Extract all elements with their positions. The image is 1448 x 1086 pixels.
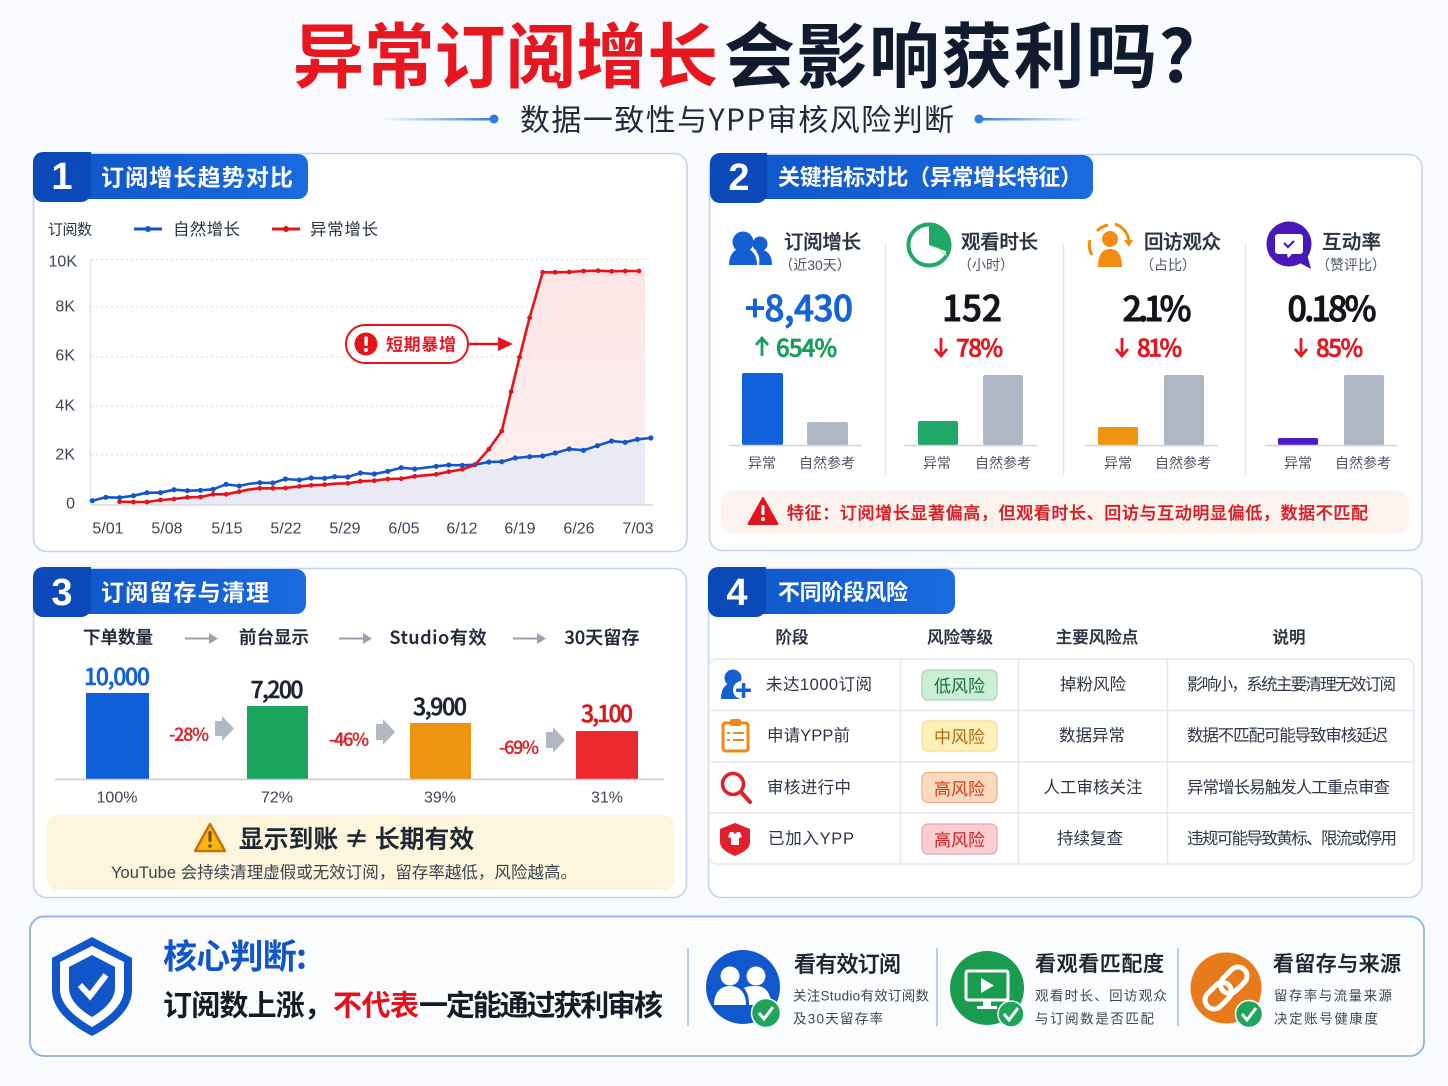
heading: panel 2 — [710, 153, 1093, 203]
row: under review — [722, 772, 1390, 802]
x axis labels: 5/29 — [329, 520, 361, 538]
panel: core conclusion — [30, 916, 1424, 1056]
metric: watch time: （小时） — [958, 257, 1014, 273]
row: before applying YPP: 数据异常 — [1059, 726, 1125, 745]
heading: panel 3: 订阅留存与清理 — [101, 574, 269, 608]
callout: feature summary: 特征：订阅增长显著偏高，但观看时长、回访与互动明显偏低，数据不匹配 — [787, 499, 1368, 524]
core judgement text: 一定能通过获利审核 — [419, 982, 663, 1024]
metric: returning viewers: 回访观众 — [1144, 226, 1221, 254]
heading: panel 2: 关键指标对比（异常增长特征） — [778, 160, 1082, 192]
core judgement text: 订阅数上涨， — [163, 982, 333, 1024]
heading: panel 4: 4 — [726, 572, 748, 614]
chart legend: 自然增长 — [173, 220, 240, 239]
x axis labels — [92, 520, 654, 538]
metric: returning viewers — [1085, 224, 1221, 471]
series: abnormal growth — [117, 268, 641, 504]
metric: returning viewers: 自然参考 — [1155, 455, 1211, 471]
metric: watch time — [904, 224, 1038, 471]
risk table — [709, 659, 1414, 864]
title: 异常订阅增长 — [293, 1, 718, 103]
tip: retention and source: 看留存与来源 — [1273, 948, 1401, 978]
bar chart: retention: 3,900 — [413, 688, 467, 722]
metric: engagement: （赞评比） — [1316, 257, 1386, 273]
metric: engagement — [1265, 222, 1397, 471]
funnel step labels: 下单数量 — [83, 624, 153, 650]
metric: engagement: 互动率 — [1322, 226, 1381, 254]
tip: retention and source: 留存率与流量来源 — [1274, 988, 1392, 1004]
row: under review: 审核进行中 — [767, 778, 851, 797]
icon: returning viewer — [1089, 224, 1133, 267]
row: under review: 高风险 — [934, 775, 985, 800]
tip: valid subscribers — [706, 947, 930, 1028]
metric: engagement: 0.18% — [1288, 282, 1376, 331]
bar chart: retention: 100% — [97, 790, 137, 806]
subtitle — [380, 96, 1088, 140]
heading: panel 4 — [708, 567, 955, 617]
row: joined YPP: 持续复查 — [1057, 829, 1123, 848]
core judgement text — [163, 930, 663, 1024]
metric: subscription growth: 订阅增长 — [784, 226, 861, 254]
panel: key metrics — [710, 153, 1422, 550]
x axis labels: 6/05 — [388, 520, 420, 538]
metric: watch time: 异常 — [923, 455, 951, 471]
bar chart: retention — [55, 658, 664, 806]
row: joined YPP: 高风险 — [934, 826, 985, 851]
icon: security shield — [52, 937, 132, 1036]
row: under 1000 subscribers: 影响小，系统主要清理无效订阅 — [1187, 675, 1396, 694]
table header: 主要风险点 — [1056, 624, 1138, 648]
panel: risk by stage — [708, 567, 1422, 898]
chart legend — [48, 220, 378, 239]
y axis labels: 8K — [55, 298, 75, 316]
callout: long-term validity — [47, 815, 674, 890]
heading: panel 3: 3 — [51, 572, 73, 614]
row: under 1000 subscribers — [721, 670, 1396, 700]
metric: subscription growth: 自然参考 — [799, 455, 855, 471]
tip: retention and source — [1190, 948, 1401, 1028]
heading: panel 1: 订阅增长趋势对比 — [101, 158, 293, 192]
x axis labels: 5/01 — [92, 520, 124, 538]
row: under review: 异常增长易触发人工重点审查 — [1187, 778, 1390, 797]
chart legend: 异常增长 — [310, 220, 378, 239]
row: under review: 人工审核关注 — [1044, 778, 1142, 797]
y axis labels: 0 — [66, 496, 75, 512]
icon: link with check — [1190, 952, 1262, 1028]
bar chart: retention: 3,100 — [581, 695, 633, 729]
tip: watch match: 看观看匹配度 — [1035, 948, 1164, 978]
x axis labels: 6/19 — [504, 520, 536, 538]
title — [293, 1, 1195, 103]
metric: watch time: 78% — [956, 328, 1003, 364]
metric: subscription growth: 654% — [776, 328, 837, 364]
row: joined YPP — [720, 823, 1397, 856]
x axis labels: 6/26 — [563, 520, 595, 538]
subtitle: 数据一致性与YPP审核风险判断 — [520, 96, 954, 140]
icon: magnifier — [722, 774, 750, 802]
icon: add user — [721, 670, 751, 699]
tip: valid subscribers: 看有效订阅 — [794, 947, 901, 979]
tip: valid subscribers: 及30天留存率 — [793, 1010, 883, 1026]
table header: 说明 — [1272, 624, 1306, 648]
funnel step labels: 30天留存 — [564, 624, 640, 650]
row: under 1000 subscribers: 低风险 — [934, 672, 985, 697]
row: joined YPP: 违规可能导致黄标、限流或停用 — [1187, 829, 1397, 848]
icon: people — [729, 232, 772, 265]
icon: clipboard — [723, 719, 748, 751]
icon: shield — [720, 823, 750, 856]
x axis labels: 5/08 — [151, 520, 183, 538]
metric: engagement: 异常 — [1284, 455, 1312, 471]
chart legend: 订阅数 — [48, 222, 92, 238]
row: before applying YPP: 中风险 — [934, 723, 985, 748]
row: before applying YPP — [723, 719, 1388, 751]
bar chart: retention: 31% — [591, 790, 623, 806]
metric: subscription growth: （近30天） — [779, 257, 851, 273]
icon: monitor with check — [950, 951, 1024, 1027]
row: under 1000 subscribers: 未达1000订阅 — [766, 675, 872, 694]
metric: returning viewers: 2.1% — [1122, 282, 1192, 331]
metric: returning viewers: 81% — [1137, 328, 1182, 364]
core judgement text: 核心判断: — [163, 930, 307, 978]
metric: returning viewers: （占比） — [1140, 257, 1196, 273]
tip: retention and source: 决定账号健康度 — [1274, 1010, 1378, 1026]
funnel step labels: 前台显示 — [239, 624, 309, 650]
y axis labels: 10K — [49, 254, 77, 270]
title: 会影响获利吗? — [724, 1, 1195, 103]
tip: valid subscribers: 关注Studio有效订阅数 — [793, 988, 930, 1004]
metric: returning viewers: 异常 — [1104, 455, 1132, 471]
callout: short-term surge — [346, 325, 513, 363]
line chart — [49, 254, 654, 538]
callout: long-term validity: YouTube 会持续清理虚假或无效订阅，留存率越低，风险越高。 — [111, 863, 577, 882]
x axis labels: 7/03 — [622, 520, 654, 538]
x axis labels: 6/12 — [446, 520, 478, 538]
table header — [776, 624, 1306, 648]
icon: chat bubble — [1266, 222, 1312, 269]
panel: subscription trend — [33, 152, 687, 552]
bar chart: retention: 7,200 — [250, 671, 304, 705]
metric: engagement: 自然参考 — [1335, 455, 1391, 471]
funnel step labels — [83, 624, 640, 650]
series: natural growth — [90, 435, 653, 503]
bar chart: retention: 39% — [424, 790, 456, 806]
heading: panel 4: 不同阶段风险 — [778, 575, 908, 607]
metric: engagement: 85% — [1316, 328, 1363, 364]
row: joined YPP: 已加入YPP — [768, 829, 854, 848]
funnel step labels: Studio有效 — [390, 624, 486, 650]
y axis labels — [49, 254, 77, 512]
icon: pie chart — [908, 224, 950, 266]
y axis labels: 4K — [55, 398, 75, 414]
row: before applying YPP: 数据不匹配可能导致审核延迟 — [1187, 726, 1388, 745]
bar chart: retention: -46% — [329, 726, 369, 752]
x axis labels: 5/15 — [211, 520, 243, 538]
y axis labels: 2K — [55, 446, 75, 464]
row: before applying YPP: 申请YPP前 — [767, 726, 850, 745]
panel: retention funnel — [33, 567, 686, 898]
metric: subscription growth: 异常 — [748, 455, 776, 471]
row: under 1000 subscribers: 掉粉风险 — [1060, 675, 1126, 694]
tip: watch match — [950, 948, 1167, 1027]
bar chart: retention: -69% — [499, 734, 539, 760]
table header: 阶段 — [776, 624, 808, 648]
icon: users with check — [706, 950, 780, 1028]
metric: watch time: 152 — [942, 281, 1002, 332]
callout: feature summary — [721, 491, 1409, 533]
callout: long-term validity: 显示到账 ≠ 长期有效 — [239, 820, 474, 856]
table header: 风险等级 — [927, 624, 994, 648]
metric: watch time: 观看时长 — [961, 226, 1038, 254]
metric: watch time: 自然参考 — [975, 455, 1031, 471]
bar chart: retention: -28% — [169, 721, 209, 747]
tip: watch match: 观看时长、回访观众 — [1035, 988, 1167, 1004]
core judgement text: 不代表 — [333, 982, 419, 1024]
heading: panel 1: 1 — [51, 156, 73, 198]
heading: panel 1 — [33, 152, 308, 202]
heading: panel 2: 2 — [728, 157, 750, 199]
metric: subscription growth — [729, 226, 862, 471]
bar chart: retention: 10,000 — [84, 658, 150, 692]
heading: panel 3 — [33, 567, 306, 617]
bar chart: retention: 72% — [261, 790, 293, 806]
tip: watch match: 与订阅数是否匹配 — [1035, 1012, 1154, 1026]
callout: short-term surge: 短期暴增 — [386, 330, 456, 356]
metric: subscription growth: +8,430 — [745, 281, 853, 332]
x axis labels: 5/22 — [270, 520, 302, 538]
y axis labels: 6K — [55, 348, 75, 364]
